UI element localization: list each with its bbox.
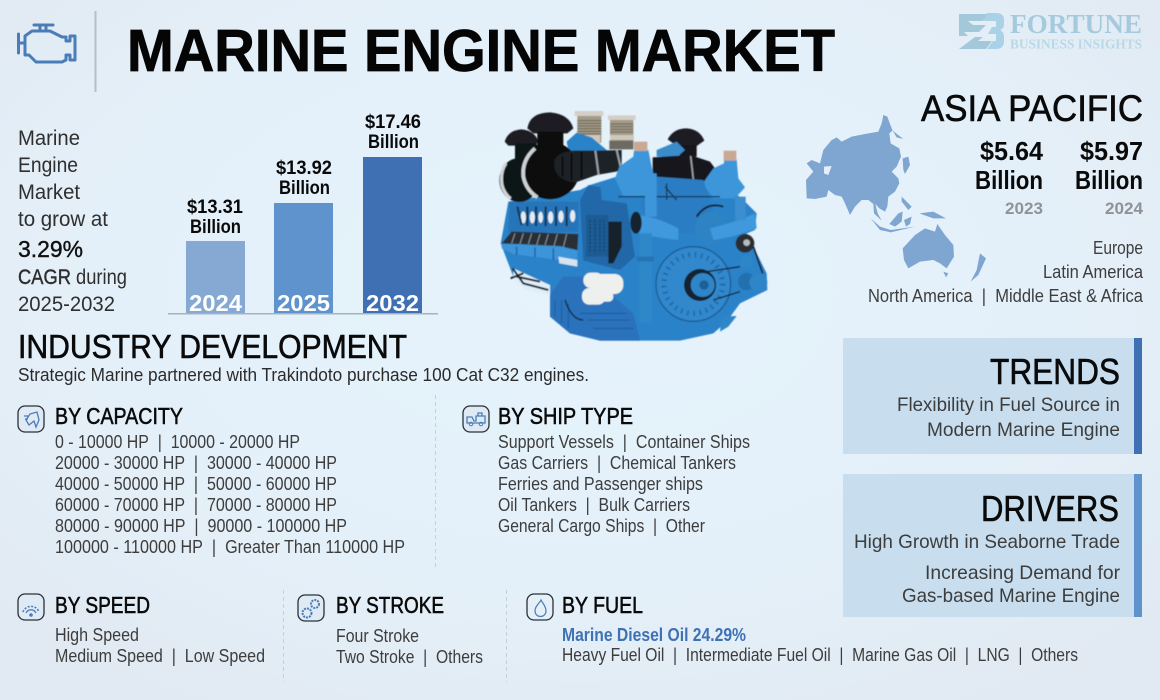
panel: by stroke xyxy=(298,592,483,667)
bar 2024: Billion xyxy=(190,217,241,238)
other regions xyxy=(868,238,1144,306)
panel: by fuel: Marine Diesel Oil 24.29% xyxy=(562,625,746,645)
stat 2024 xyxy=(1075,136,1144,218)
blue hose xyxy=(567,133,607,158)
panel: trends: Flexibility in Fuel Source in xyxy=(897,394,1120,416)
bar 2025: $13.92 xyxy=(276,158,332,179)
panel: by fuel: Heavy Fuel Oil | Intermediate Fuel Oil | Marine Gas Oil | LNG | Others xyxy=(562,645,1078,665)
stat 2024: 2024 xyxy=(1105,199,1144,218)
growth summary text: 2025-2032 xyxy=(18,293,115,316)
industry development: Strategic Marine partnered with Trakindoto purchase 100 Cat C32 engines. xyxy=(18,365,589,385)
icon: speedometer xyxy=(18,594,44,620)
panel: by ship type: BY SHIP TYPE xyxy=(498,403,633,429)
growth summary text xyxy=(18,127,127,316)
panel: by ship type: Ferries and Passenger ships xyxy=(498,474,703,494)
panel: by capacity: 20000 - 30000 HP | 30000 - 40000 HP xyxy=(55,453,337,473)
valve row xyxy=(508,202,578,233)
logo: Fortune Business Insights xyxy=(959,9,1142,52)
region: Asia Pacific xyxy=(868,88,1144,306)
body base xyxy=(501,177,767,341)
growth summary text: Engine xyxy=(18,154,78,177)
stat 2024: Billion xyxy=(1075,165,1143,195)
panel: by capacity: 60000 - 70000 HP | 70000 - 80000 HP xyxy=(55,495,337,515)
bar 2032: Billion xyxy=(368,132,419,153)
panel: by ship type: Oil Tankers | Bulk Carriers xyxy=(498,495,690,515)
map: Asia Pacific xyxy=(806,115,986,282)
panel: trends xyxy=(843,338,1142,454)
panel: by speed: Medium Speed | Low Speed xyxy=(55,646,265,666)
panel: trends: Modern Marine Engine xyxy=(927,419,1120,441)
panel: by capacity: 100000 - 110000 HP | Greater Than 110000 HP xyxy=(55,537,405,557)
bar 2025: Billion xyxy=(279,178,330,199)
growth summary text: Market xyxy=(18,181,80,204)
panel: by capacity: 40000 - 50000 HP | 50000 - 60000 HP xyxy=(55,474,337,494)
icon: ship type tanker xyxy=(463,406,489,432)
panel: by speed: BY SPEED xyxy=(55,592,150,618)
stat 2023 xyxy=(975,136,1044,218)
logo: Fortune Business Insights: FORTUNE xyxy=(1010,9,1142,39)
rail cover xyxy=(502,232,578,250)
stat 2024: $5.97 xyxy=(1080,136,1143,166)
other regions: Europe xyxy=(1093,238,1143,258)
logo: Fortune Business Insights: BUSINESS INSIGHTS xyxy=(1010,38,1142,52)
panel: by fuel xyxy=(527,592,1078,665)
industry development: INDUSTRY DEVELOPMENT xyxy=(18,328,407,365)
icon: gears xyxy=(298,595,324,621)
panel: by capacity: 0 - 10000 HP | 10000 - 20000 HP xyxy=(55,432,300,452)
panel: drivers: High Growth in Seaborne Trade xyxy=(854,531,1120,553)
bar 2025 xyxy=(274,158,333,316)
growth summary text: Marine xyxy=(18,127,80,150)
panel: by fuel: BY FUEL xyxy=(562,592,643,618)
growth summary text: 3.29% xyxy=(18,236,83,262)
header divider xyxy=(94,11,96,92)
icon: engine xyxy=(18,25,75,62)
white cylinders xyxy=(582,273,623,305)
air filters xyxy=(505,129,538,146)
left underside background peek xyxy=(513,268,550,295)
panel: by stroke: BY STROKE xyxy=(336,592,444,618)
panel: drivers: Increasing Demand for xyxy=(925,562,1120,584)
panel: by capacity: 80000 - 90000 HP | 90000 - 100000 HP xyxy=(55,516,347,536)
panel: by ship type xyxy=(463,403,750,536)
bar 2032: $17.46 xyxy=(365,112,421,133)
front pipes xyxy=(633,215,678,240)
panel: drivers xyxy=(843,474,1142,617)
industry development xyxy=(18,328,589,385)
panel: by ship type: Gas Carriers | Chemical Tankers xyxy=(498,453,736,473)
icon: capacity horse xyxy=(18,406,44,432)
bar chart xyxy=(168,112,438,316)
title: MARINE ENGINE MARKET xyxy=(127,18,835,84)
blue manifolds xyxy=(615,150,657,197)
panel: by ship type: Support Vessels | Container Ships xyxy=(498,432,750,452)
panel: trends: TRENDS xyxy=(990,351,1120,392)
growth summary text: CAGR during xyxy=(18,266,127,289)
bar 2032: 2032 xyxy=(366,290,419,316)
central dark block xyxy=(580,185,635,270)
icon: fuel drop xyxy=(527,594,553,620)
stat 2023: 2023 xyxy=(1005,199,1043,218)
pulley xyxy=(656,247,731,321)
bar 2025: 2025 xyxy=(277,290,330,316)
panel: by speed: High Speed xyxy=(55,625,139,645)
bar 2024: 2024 xyxy=(189,290,242,316)
panel: drivers: Gas-based Marine Engine xyxy=(902,585,1120,607)
region: Asia Pacific: ASIA PACIFIC xyxy=(921,88,1143,129)
stat 2023: $5.64 xyxy=(980,136,1044,166)
panel: drivers: DRIVERS xyxy=(981,488,1119,529)
panel: by stroke: Two Stroke | Others xyxy=(336,647,483,667)
bar 2024 xyxy=(186,197,245,316)
other regions: Latin America xyxy=(1043,262,1144,282)
panel: by capacity xyxy=(18,403,405,557)
bar 2032 xyxy=(363,112,422,316)
panel: by stroke: Four Stroke xyxy=(336,626,419,646)
base xyxy=(550,277,640,341)
bar 2024: $13.31 xyxy=(187,197,243,218)
illustration: marine engine xyxy=(499,111,767,341)
panel: by speed xyxy=(18,592,265,666)
panel: by ship type: General Cargo Ships | Other xyxy=(498,516,705,536)
panel: by capacity: BY CAPACITY xyxy=(55,403,183,429)
exhaust bellows xyxy=(575,111,603,143)
growth summary text: to grow at xyxy=(18,208,108,231)
stat 2023: Billion xyxy=(975,165,1043,195)
black drums and ducts xyxy=(499,158,539,202)
other regions: North America | Middle East & Africa xyxy=(868,286,1144,306)
